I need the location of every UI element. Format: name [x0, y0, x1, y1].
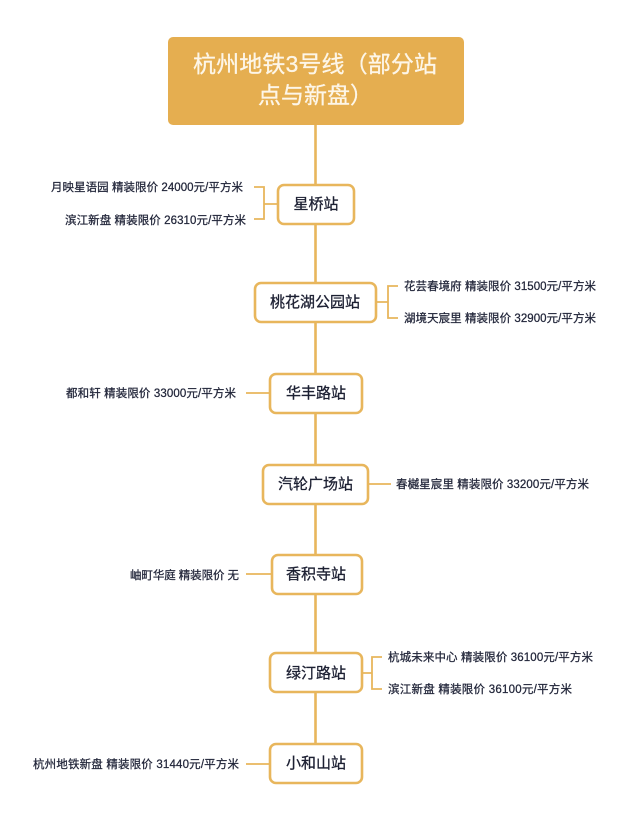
listing: 春樾星宸里: 春樾星宸里 精装限价 33200元/平方米 — [396, 477, 590, 491]
listing: 滨江新盘: 滨江新盘 精装限价 26310元/平方米 — [65, 213, 246, 227]
station: 华丰路站 — [270, 374, 362, 413]
station: 小和山站: 小和山站 — [286, 755, 346, 772]
station: 绿汀路站 — [270, 653, 362, 692]
listing: 都和轩: 都和轩 精装限价 33000元/平方米 — [66, 386, 236, 400]
station: 汽轮广场站 — [263, 465, 368, 504]
listing: 湖境天宸里: 湖境天宸里 精装限价 32900元/平方米 — [404, 311, 596, 325]
station: 桃花湖公园站: 桃花湖公园站 — [270, 294, 360, 311]
connector: 华丰路站 listing — [246, 392, 270, 394]
title box: 杭州地铁3号线（部分站 — [193, 51, 437, 77]
listing: 花芸春境府: 花芸春境府 精装限价 31500元/平方米 — [404, 279, 596, 293]
listing: 滨江新盘: 滨江新盘 精装限价 36100元/平方米 — [388, 682, 572, 696]
connector: 桃花湖公园站 listings — [376, 286, 398, 318]
connector: 小和山站 listing — [246, 763, 270, 765]
station: 华丰路站: 华丰路站 — [286, 385, 346, 402]
station: 香积寺站 — [272, 555, 362, 594]
title box: 点与新盘） — [258, 82, 373, 108]
station: 香积寺站: 香积寺站 — [286, 566, 346, 583]
listing: 岫町华庭: 岫町华庭 精装限价 无 — [130, 568, 240, 582]
station: 星桥站: 星桥站 — [293, 196, 339, 213]
connector: 绿汀路站 listings — [362, 657, 382, 689]
station: 汽轮广场站: 汽轮广场站 — [278, 476, 353, 493]
connector: 星桥站 listings — [254, 187, 278, 219]
listing: 月映星语园: 月映星语园 精装限价 24000元/平方米 — [51, 180, 244, 194]
listing: 杭城未来中心: 杭城未来中心 精装限价 36100元/平方米 — [388, 650, 594, 664]
listing: 杭州地铁新盘: 杭州地铁新盘 精装限价 31440元/平方米 — [33, 757, 240, 771]
station: 桃花湖公园站 — [255, 283, 376, 322]
main vertical line — [314, 120, 317, 770]
station: 星桥站 — [278, 185, 354, 224]
connector: 香积寺站 listing — [246, 573, 272, 575]
station: 绿汀路站: 绿汀路站 — [286, 665, 346, 682]
station: 小和山站 — [270, 744, 362, 783]
connector: 汽轮广场站 listing — [368, 483, 391, 485]
title box — [168, 37, 464, 125]
